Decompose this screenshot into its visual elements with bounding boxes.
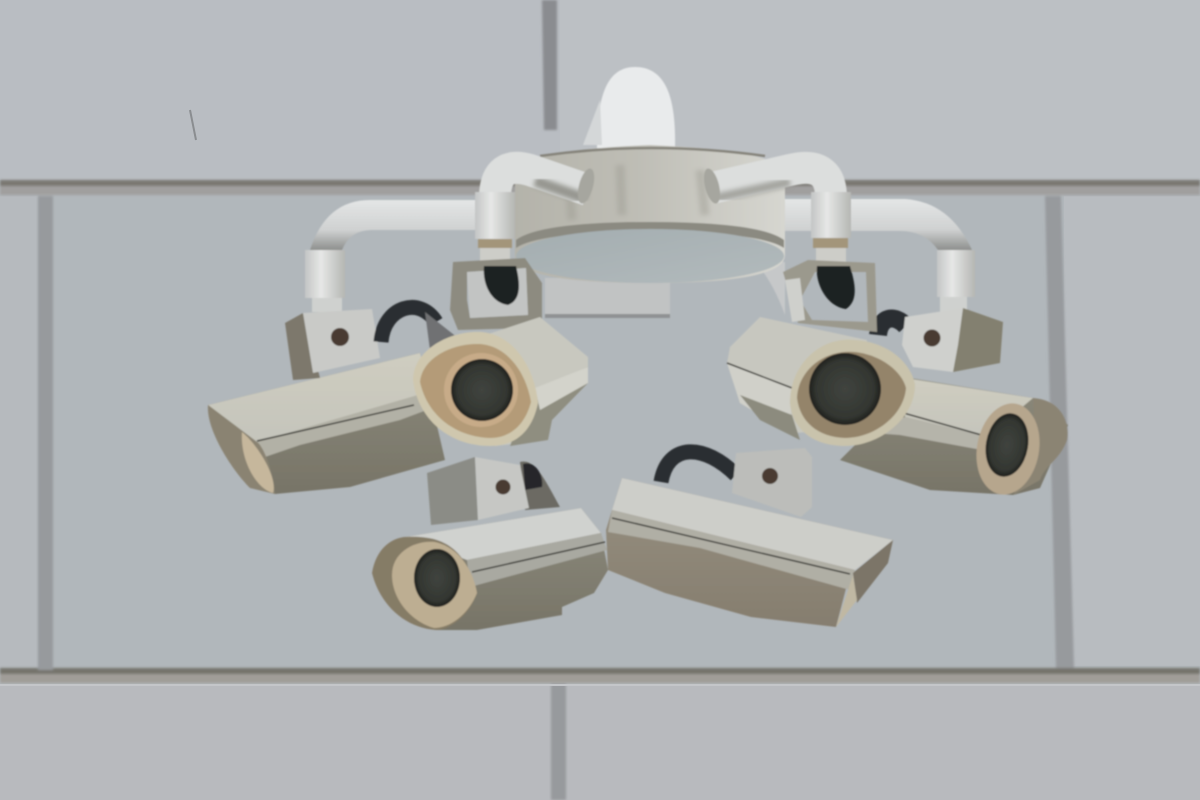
- camera: front right: [727, 260, 915, 446]
- inner right pipe: [701, 167, 851, 262]
- outer right pipe: [782, 199, 975, 313]
- central disc housing: [515, 145, 785, 283]
- lens: [414, 549, 460, 607]
- cable: [381, 307, 458, 350]
- white dome conduit: [583, 67, 675, 148]
- camera: front left: [413, 258, 588, 446]
- lens: [809, 353, 881, 425]
- cable: [878, 319, 906, 335]
- scene objects: [208, 67, 1068, 630]
- housing: [208, 353, 445, 494]
- bracket: [783, 260, 877, 332]
- housing: [840, 378, 1068, 495]
- front ring: [969, 398, 1047, 500]
- bracket: [427, 457, 560, 525]
- housing: [727, 317, 867, 440]
- housing: [606, 478, 893, 627]
- inner left pipe: [475, 167, 597, 262]
- front ring: [392, 542, 477, 628]
- housing: [405, 508, 608, 630]
- camera: back right: [840, 308, 1068, 500]
- housing: [470, 317, 588, 446]
- cable: [661, 452, 736, 482]
- front hood: [372, 537, 477, 630]
- outer left pipe: [305, 200, 480, 312]
- wall mounting plate: [545, 262, 785, 318]
- bracket: [902, 308, 1003, 372]
- camera: bottom right: [606, 448, 893, 627]
- bracket: [285, 309, 380, 380]
- front ring: [797, 352, 906, 438]
- bracket: [450, 258, 542, 330]
- camera: bottom left: [372, 457, 608, 630]
- front ring: [242, 432, 274, 493]
- front ring: [420, 344, 531, 438]
- front hood: [790, 340, 915, 446]
- camera: back left: [208, 307, 458, 494]
- lens: [981, 410, 1033, 480]
- bracket: [732, 448, 812, 517]
- lens: [451, 359, 513, 421]
- front hood: [413, 332, 538, 446]
